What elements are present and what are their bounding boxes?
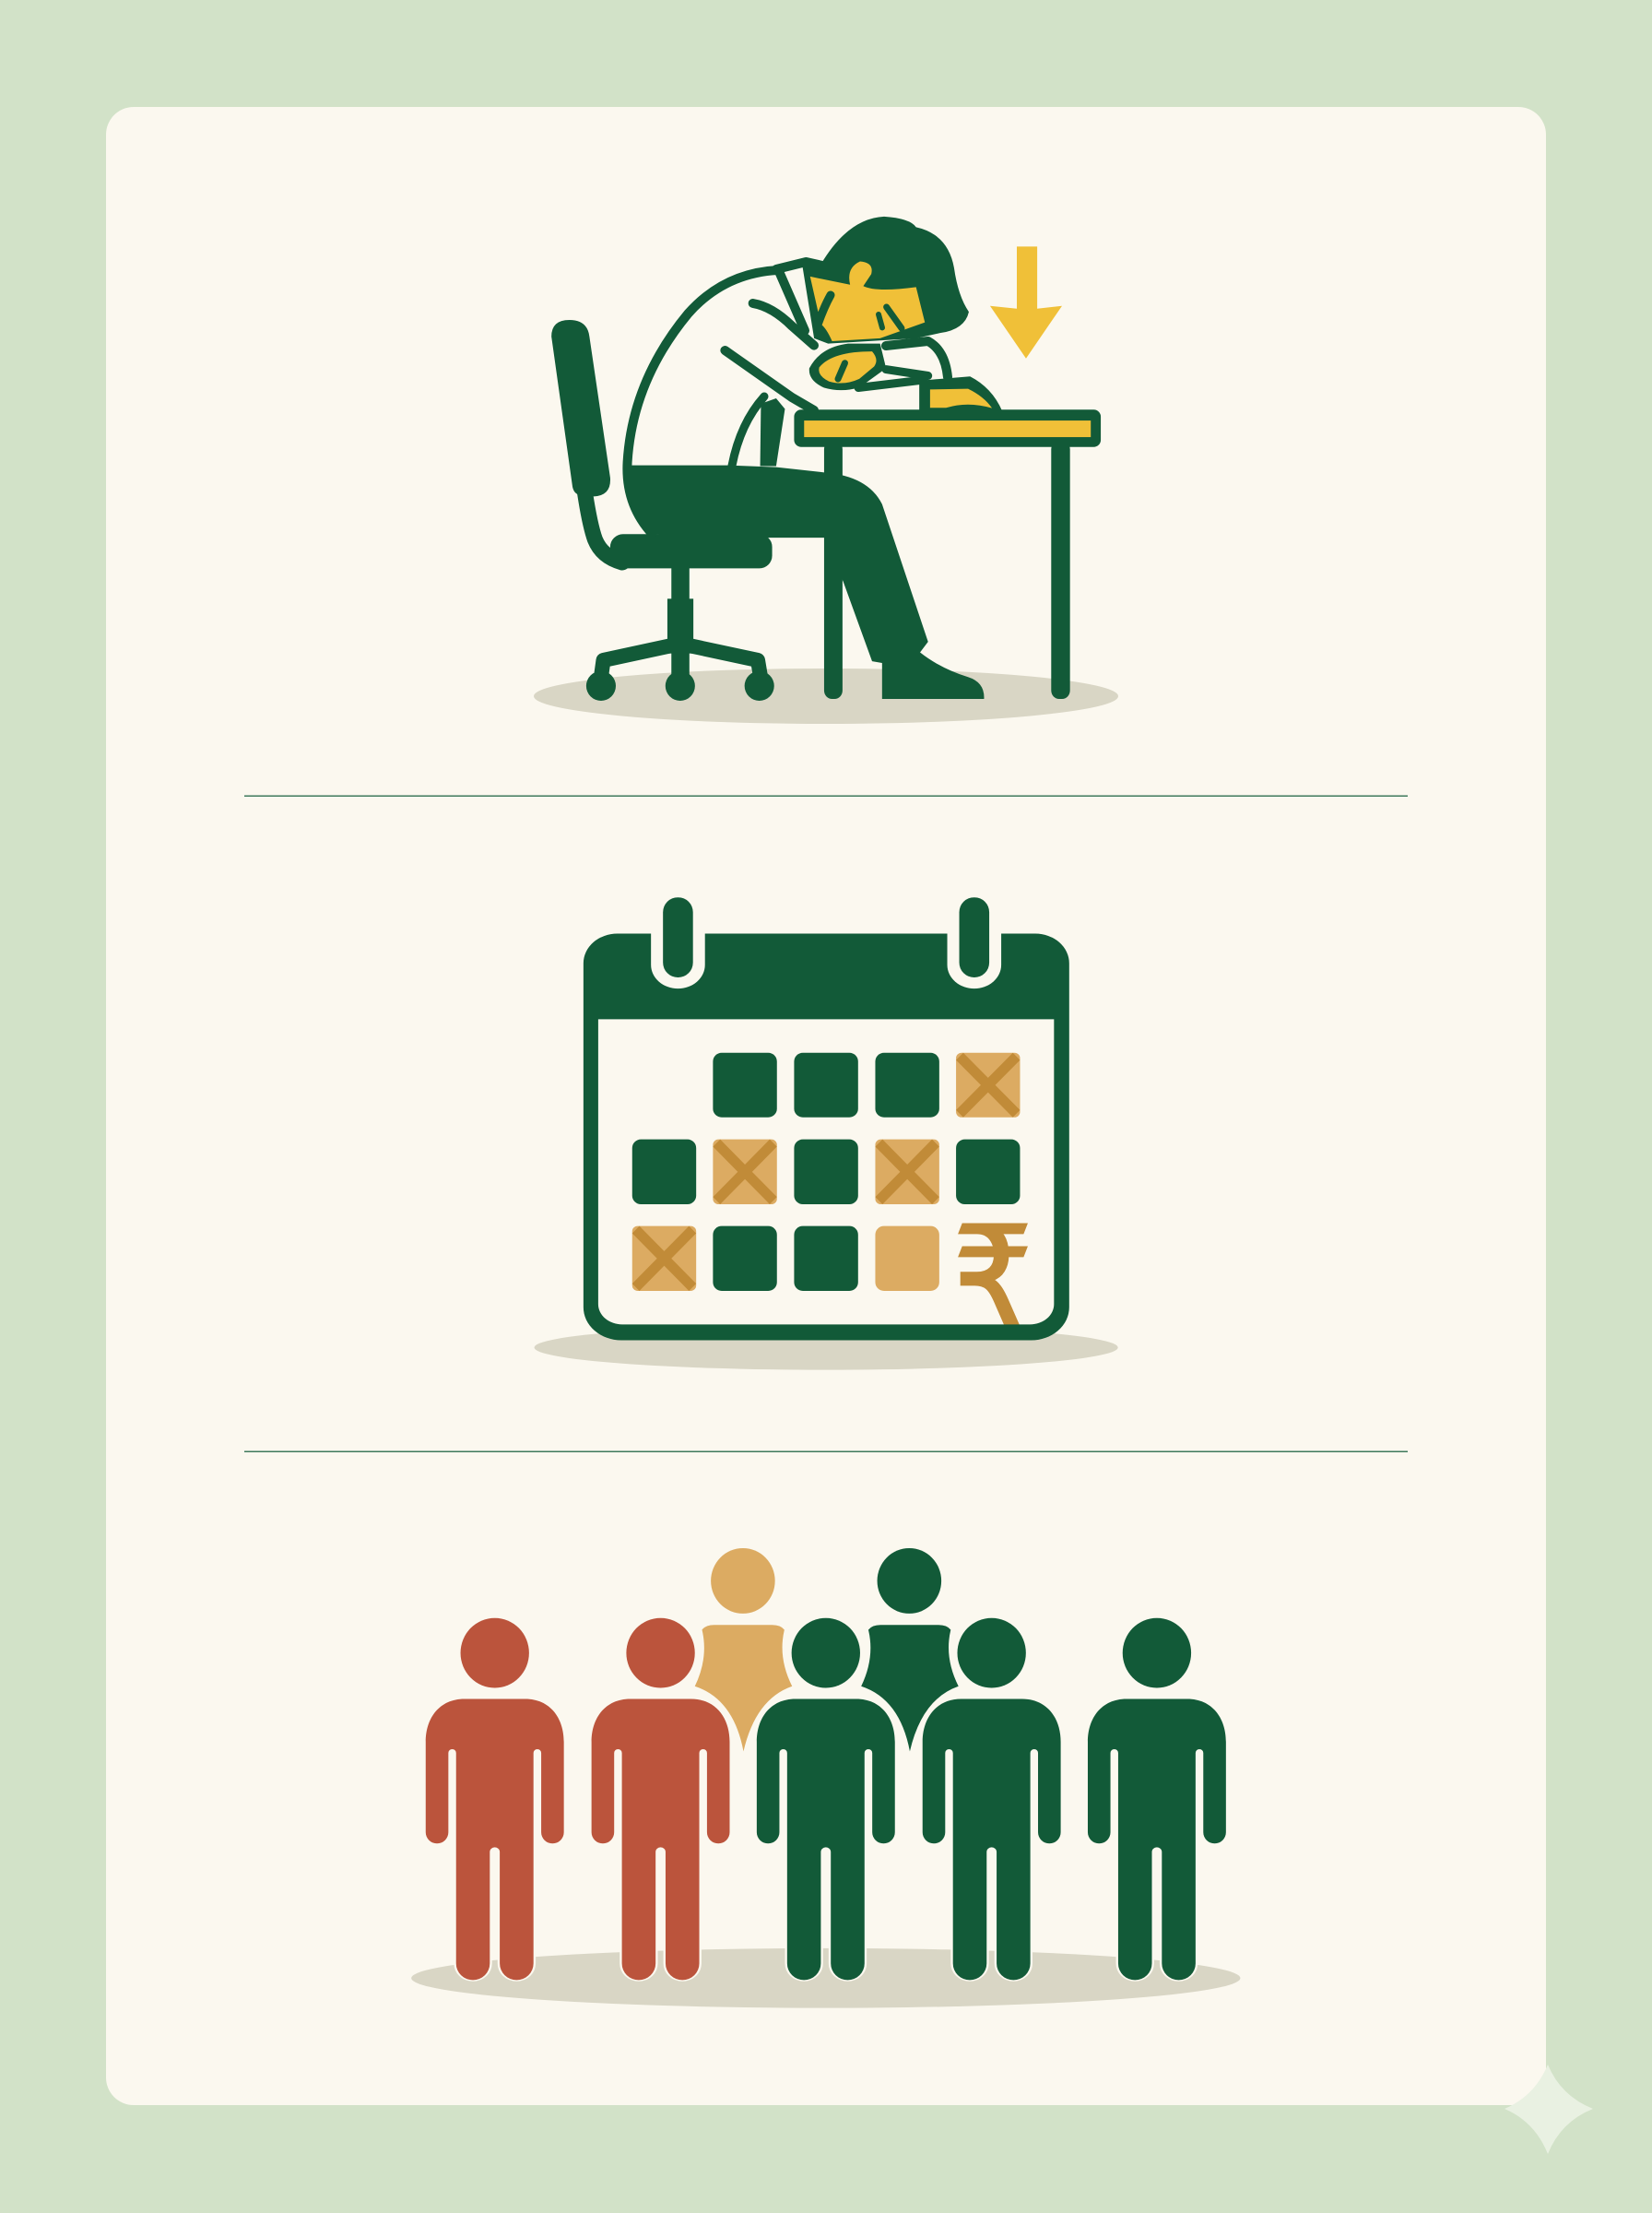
- person: red 2: [592, 1618, 729, 1980]
- panel: main card: [106, 107, 1546, 2105]
- icon: desk: [794, 409, 1101, 699]
- floor shadow: [535, 1325, 1118, 1370]
- person: green 2: [923, 1618, 1061, 1980]
- rupee symbol: ₹: [953, 1197, 1032, 1363]
- illustration: exhausted worker at desk: [534, 217, 1118, 724]
- person: green 3: [1088, 1618, 1226, 1980]
- person: back row tan: [695, 1548, 792, 1751]
- figure: slumped person: [627, 217, 1002, 699]
- arrow: downward yellow: [990, 246, 1062, 359]
- illustration: group of people: [411, 1548, 1240, 2008]
- binder ring left: [651, 897, 705, 988]
- person: red 1: [426, 1618, 564, 1980]
- calendar frame: [584, 933, 1069, 1341]
- floor shadow: [534, 669, 1118, 724]
- calendar day grid: [632, 1053, 1020, 1291]
- floor shadow: [411, 1948, 1240, 2008]
- divider: [244, 795, 1408, 797]
- icon: office chair: [551, 320, 774, 701]
- icon: sparkle watermark: [1504, 2065, 1593, 2154]
- person: green 1: [757, 1618, 895, 1980]
- binder ring right: [948, 897, 1001, 988]
- person: back row green: [861, 1548, 959, 1751]
- illustration: calendar with missed days: [535, 897, 1118, 1370]
- divider: [244, 1451, 1408, 1452]
- calendar paper: [592, 1014, 1060, 1331]
